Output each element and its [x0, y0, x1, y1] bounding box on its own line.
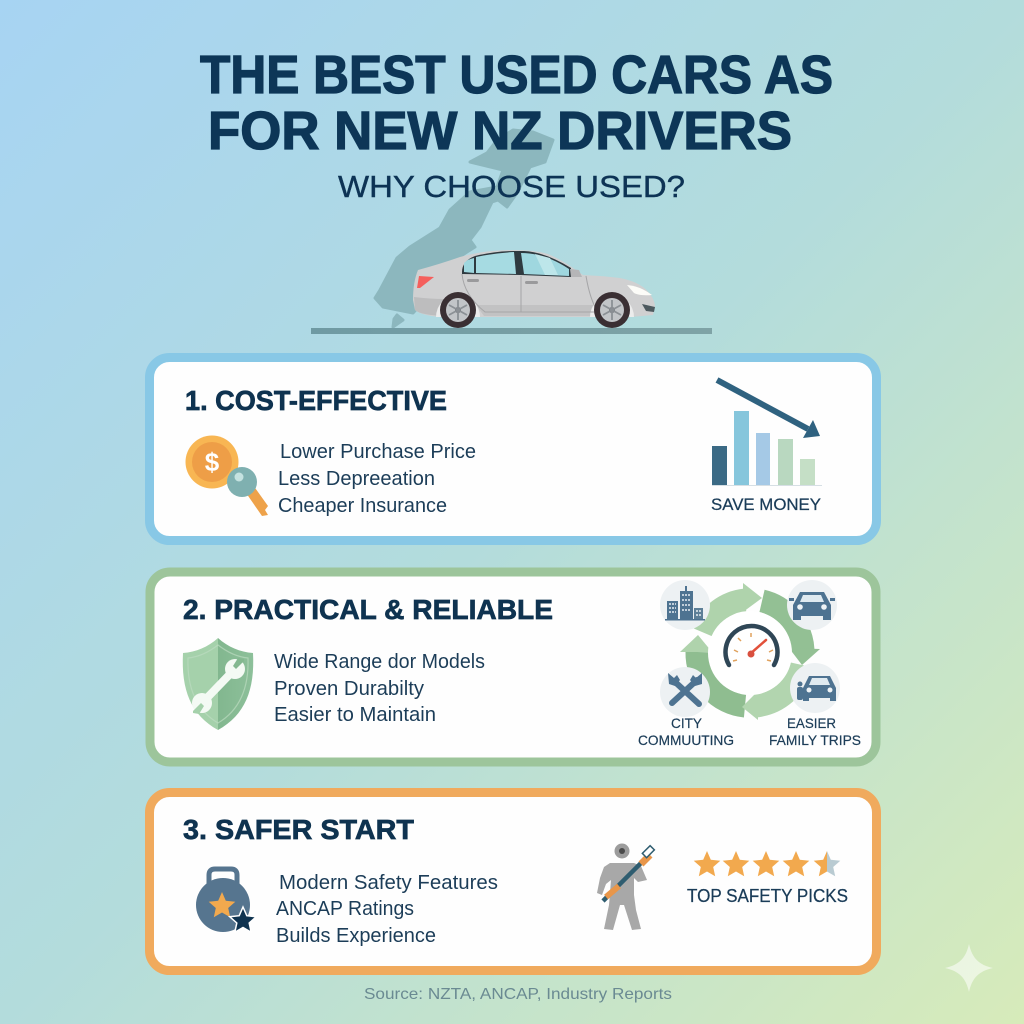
- icon: crossed tools: [660, 667, 710, 717]
- panel 2 heading: 2. PRACTICAL & RELIABLE: [183, 594, 553, 625]
- icon: shield with wrench: [183, 638, 253, 730]
- panel: practical and reliable: [150, 572, 876, 762]
- panel 2 bullet list: [274, 651, 485, 726]
- title: THE BEST USED CARS AS: [200, 45, 833, 105]
- icon: coin and key: $: [205, 447, 220, 477]
- panel 1 heading: 1. COST-EFFECTIVE: [185, 385, 447, 416]
- city commuting label: CITY: [671, 715, 703, 731]
- panel: safer start: [150, 792, 876, 970]
- title: [200, 45, 833, 161]
- title: FOR NEW NZ DRIVERS: [208, 101, 792, 161]
- city commuting label: [638, 715, 734, 748]
- subtitle: WHY CHOOSE USED?: [338, 169, 685, 204]
- map of New Zealand South Island: [375, 130, 553, 327]
- panel 1 bullet list: [278, 441, 476, 517]
- cycle arrows: [680, 583, 820, 720]
- easier family trips label: [769, 715, 861, 748]
- car illustration: [413, 250, 655, 328]
- road: [311, 328, 712, 334]
- panel 2 bullet list: Wide Range dor Models: [274, 651, 485, 673]
- panel 1 bullet list: Less Depreeation: [278, 468, 435, 490]
- icon: sparkle: [945, 944, 993, 992]
- panel 1 bullet list: Lower Purchase Price: [280, 441, 476, 463]
- white hub: [708, 611, 792, 695]
- icon: city buildings: [660, 580, 710, 630]
- easier family trips label: FAMILY TRIPS: [769, 732, 861, 748]
- panel 1 bullet list: Cheaper Insurance: [278, 495, 447, 517]
- bar chart: falling costs: [712, 380, 822, 486]
- cycle diagram: [638, 580, 861, 748]
- top safety picks label: TOP SAFETY PICKS: [687, 886, 848, 906]
- panel 2 bullet list: Easier to Maintain: [274, 704, 436, 726]
- easier family trips label: EASIER: [787, 715, 836, 731]
- icon: weight with stars: [196, 869, 256, 932]
- icon: crash test figure with tool: [597, 844, 654, 930]
- panel 3 bullet list: Builds Experience: [276, 925, 436, 947]
- source line: Source: NZTA, ANCAP, Industry Reports: [364, 986, 672, 1003]
- five star rating: [694, 851, 840, 876]
- panel 3 heading: 3. SAFER START: [183, 814, 414, 845]
- panel 2 bullet list: Proven Durabilty: [274, 678, 424, 700]
- panel 3 bullet list: Modern Safety Features: [279, 872, 498, 894]
- save money label: SAVE MONEY: [711, 495, 821, 514]
- icon: family car: [790, 663, 840, 713]
- panel 3 bullet list: ANCAP Ratings: [276, 898, 414, 920]
- city commuting label: COMMUUTING: [638, 732, 734, 748]
- panel: cost-effective: [150, 358, 876, 540]
- icon: speedometer: [726, 626, 778, 665]
- icon: car front: [787, 580, 837, 630]
- panel 3 bullet list: [276, 872, 498, 947]
- icon: coin and key: [186, 436, 268, 516]
